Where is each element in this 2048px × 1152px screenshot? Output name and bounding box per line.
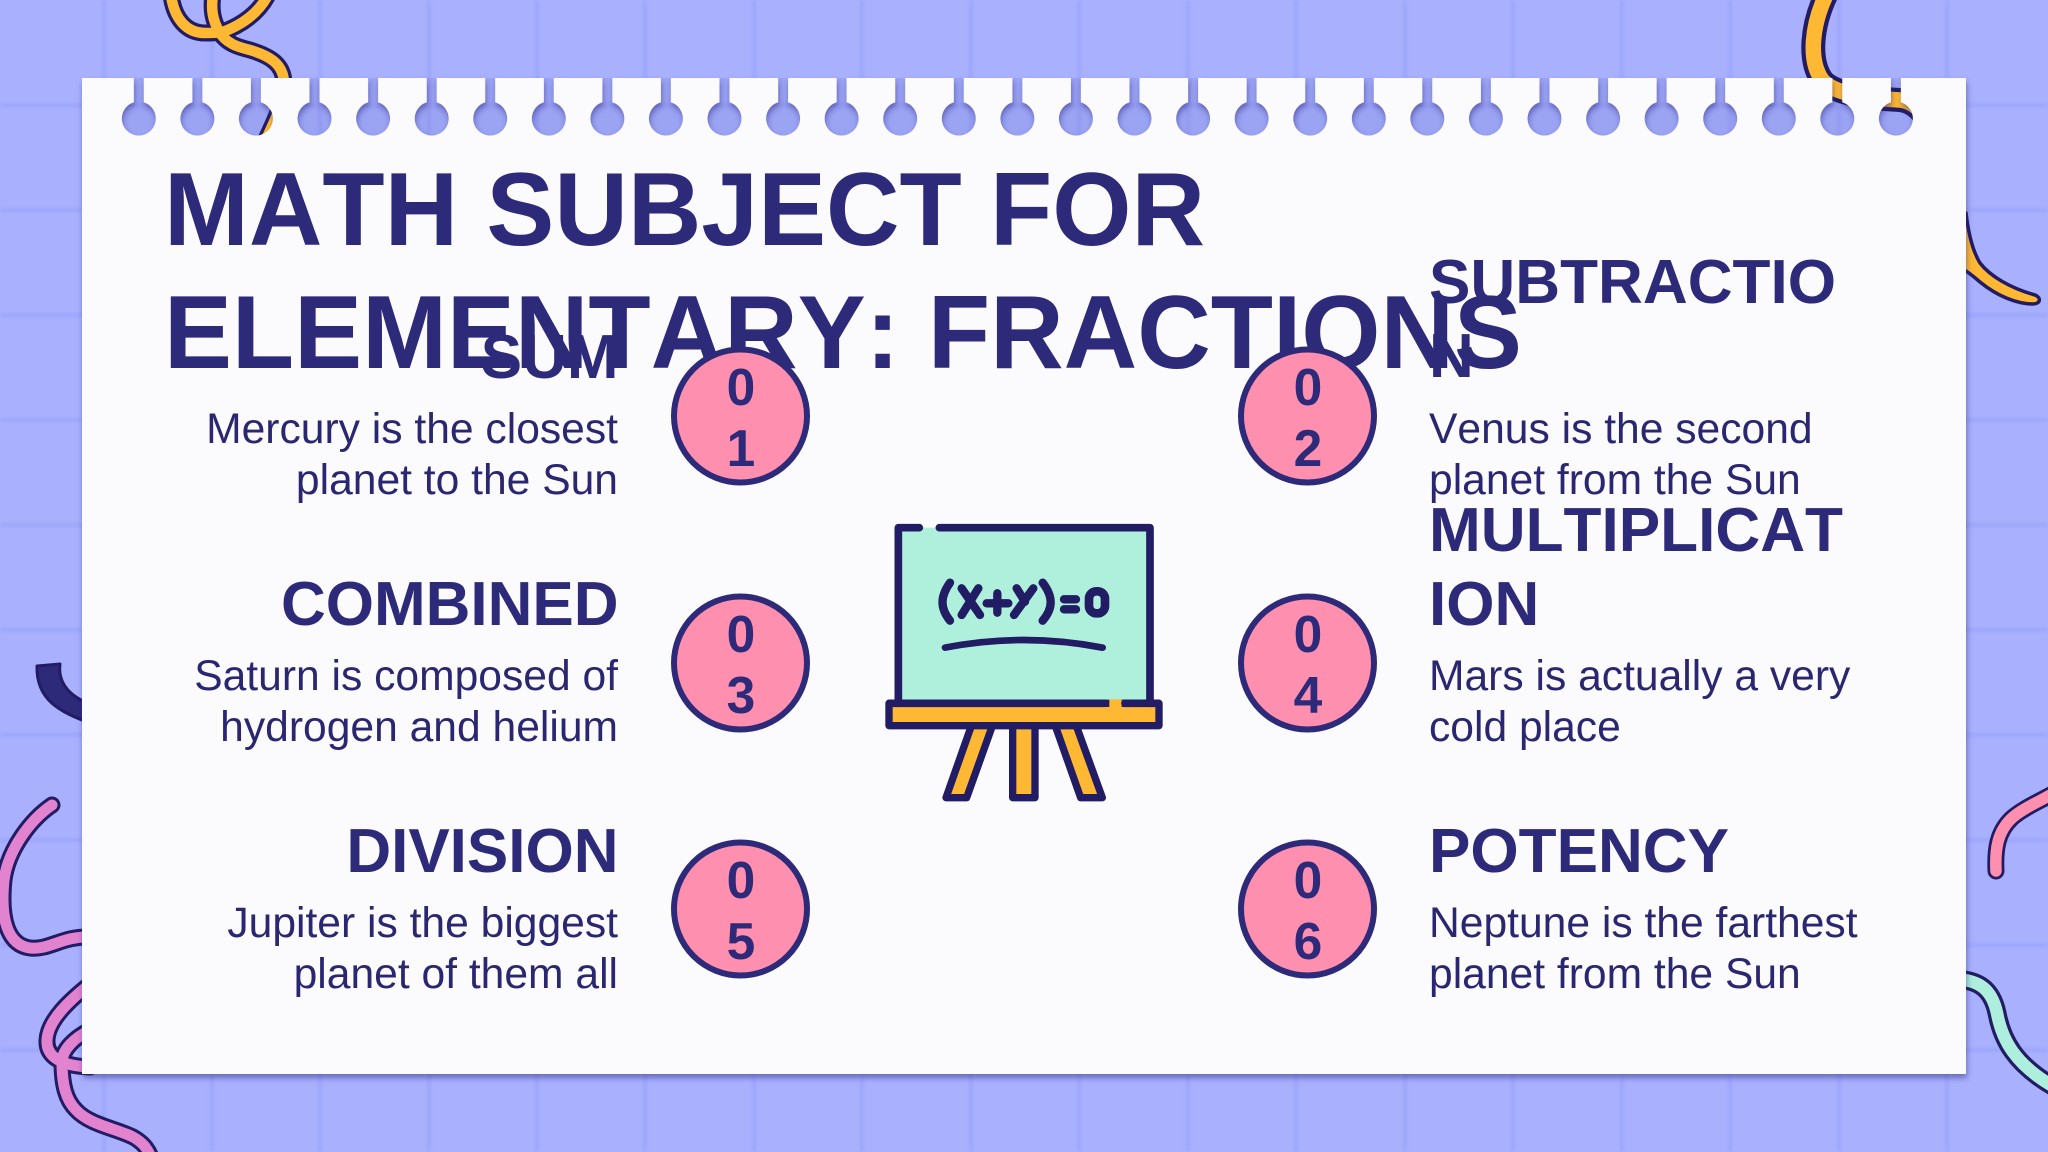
description: sum: planet to the Sun bbox=[296, 456, 618, 504]
title bbox=[164, 152, 1522, 391]
number badge 03 bbox=[674, 596, 807, 730]
number badge 01: 1 bbox=[727, 419, 755, 477]
heading: multiplication: ION bbox=[1429, 570, 1539, 639]
heading: subtraction bbox=[1429, 248, 1836, 391]
number badge 06: 0 bbox=[1294, 851, 1322, 909]
number badge 05 bbox=[674, 842, 807, 976]
description: combined: hydrogen and helium bbox=[220, 703, 618, 751]
heading: multiplication: MULTIPLICAT bbox=[1429, 496, 1843, 565]
description: sum: Mercury is the closest bbox=[206, 405, 618, 453]
heading: multiplication bbox=[1429, 496, 1843, 639]
description: division: Jupiter is the biggest bbox=[227, 899, 618, 947]
description: division: planet of them all bbox=[294, 950, 618, 998]
heading: subtraction: SUBTRACTIO bbox=[1429, 248, 1836, 317]
number badge 02: 2 bbox=[1294, 419, 1322, 477]
icon: chalkboard on easel bbox=[889, 528, 1159, 798]
number badge 06 bbox=[1241, 842, 1374, 976]
decorative strand: yellow top right bbox=[1813, 0, 2039, 304]
item 06: potency bbox=[1241, 817, 1858, 998]
number badge 03: 0 bbox=[727, 605, 755, 663]
title: ELEMENTARY: FRACTIONS bbox=[164, 275, 1522, 391]
number badge 02: 0 bbox=[1294, 358, 1322, 416]
number badge 01: 0 bbox=[727, 358, 755, 416]
number badge 04: 4 bbox=[1294, 666, 1323, 724]
description: subtraction: Venus is the second bbox=[1429, 405, 1813, 453]
decorative strand: pink bottom left bbox=[47, 984, 152, 1152]
heading: division: DIVISION bbox=[346, 817, 618, 886]
panel: notebook paper with punched holes bbox=[82, 78, 1966, 1074]
decorative strand: yellow top left bbox=[171, 0, 284, 148]
decorative strand: pink right bbox=[1996, 792, 2048, 871]
number badge 04 bbox=[1241, 596, 1374, 730]
number badge 01 bbox=[674, 350, 807, 482]
item 03: combined bbox=[194, 570, 807, 751]
number badge 05: 5 bbox=[727, 912, 755, 970]
number badge 05: 0 bbox=[727, 851, 755, 909]
number badge 03: 3 bbox=[727, 666, 755, 724]
decorative strand: pink left bbox=[3, 805, 90, 948]
heading: subtraction: N bbox=[1429, 322, 1474, 391]
heading: combined: COMBINED bbox=[281, 570, 618, 639]
title: MATH SUBJECT FOR bbox=[164, 152, 1205, 268]
description: combined: Saturn is composed of bbox=[194, 652, 618, 700]
heading: potency: POTENCY bbox=[1429, 817, 1729, 886]
number badge 02 bbox=[1241, 350, 1374, 482]
item 05: division bbox=[227, 817, 807, 998]
number badge 06: 6 bbox=[1294, 912, 1322, 970]
description: multiplication: Mars is actually a very bbox=[1429, 652, 1851, 700]
item 02: subtraction bbox=[1241, 248, 1836, 504]
decorative strand: teal right bbox=[1955, 979, 2048, 1088]
number badge 04: 0 bbox=[1294, 605, 1322, 663]
description: potency: planet from the Sun bbox=[1429, 950, 1801, 998]
description: subtraction: planet from the Sun bbox=[1429, 456, 1801, 504]
heading: sum: SUM bbox=[481, 323, 618, 392]
item 01: sum bbox=[206, 323, 807, 504]
decorative strand: navy left bbox=[37, 664, 90, 723]
description: multiplication: cold place bbox=[1429, 703, 1621, 751]
description: potency: Neptune is the farthest bbox=[1429, 899, 1858, 947]
item 04: multiplication bbox=[1241, 496, 1851, 751]
